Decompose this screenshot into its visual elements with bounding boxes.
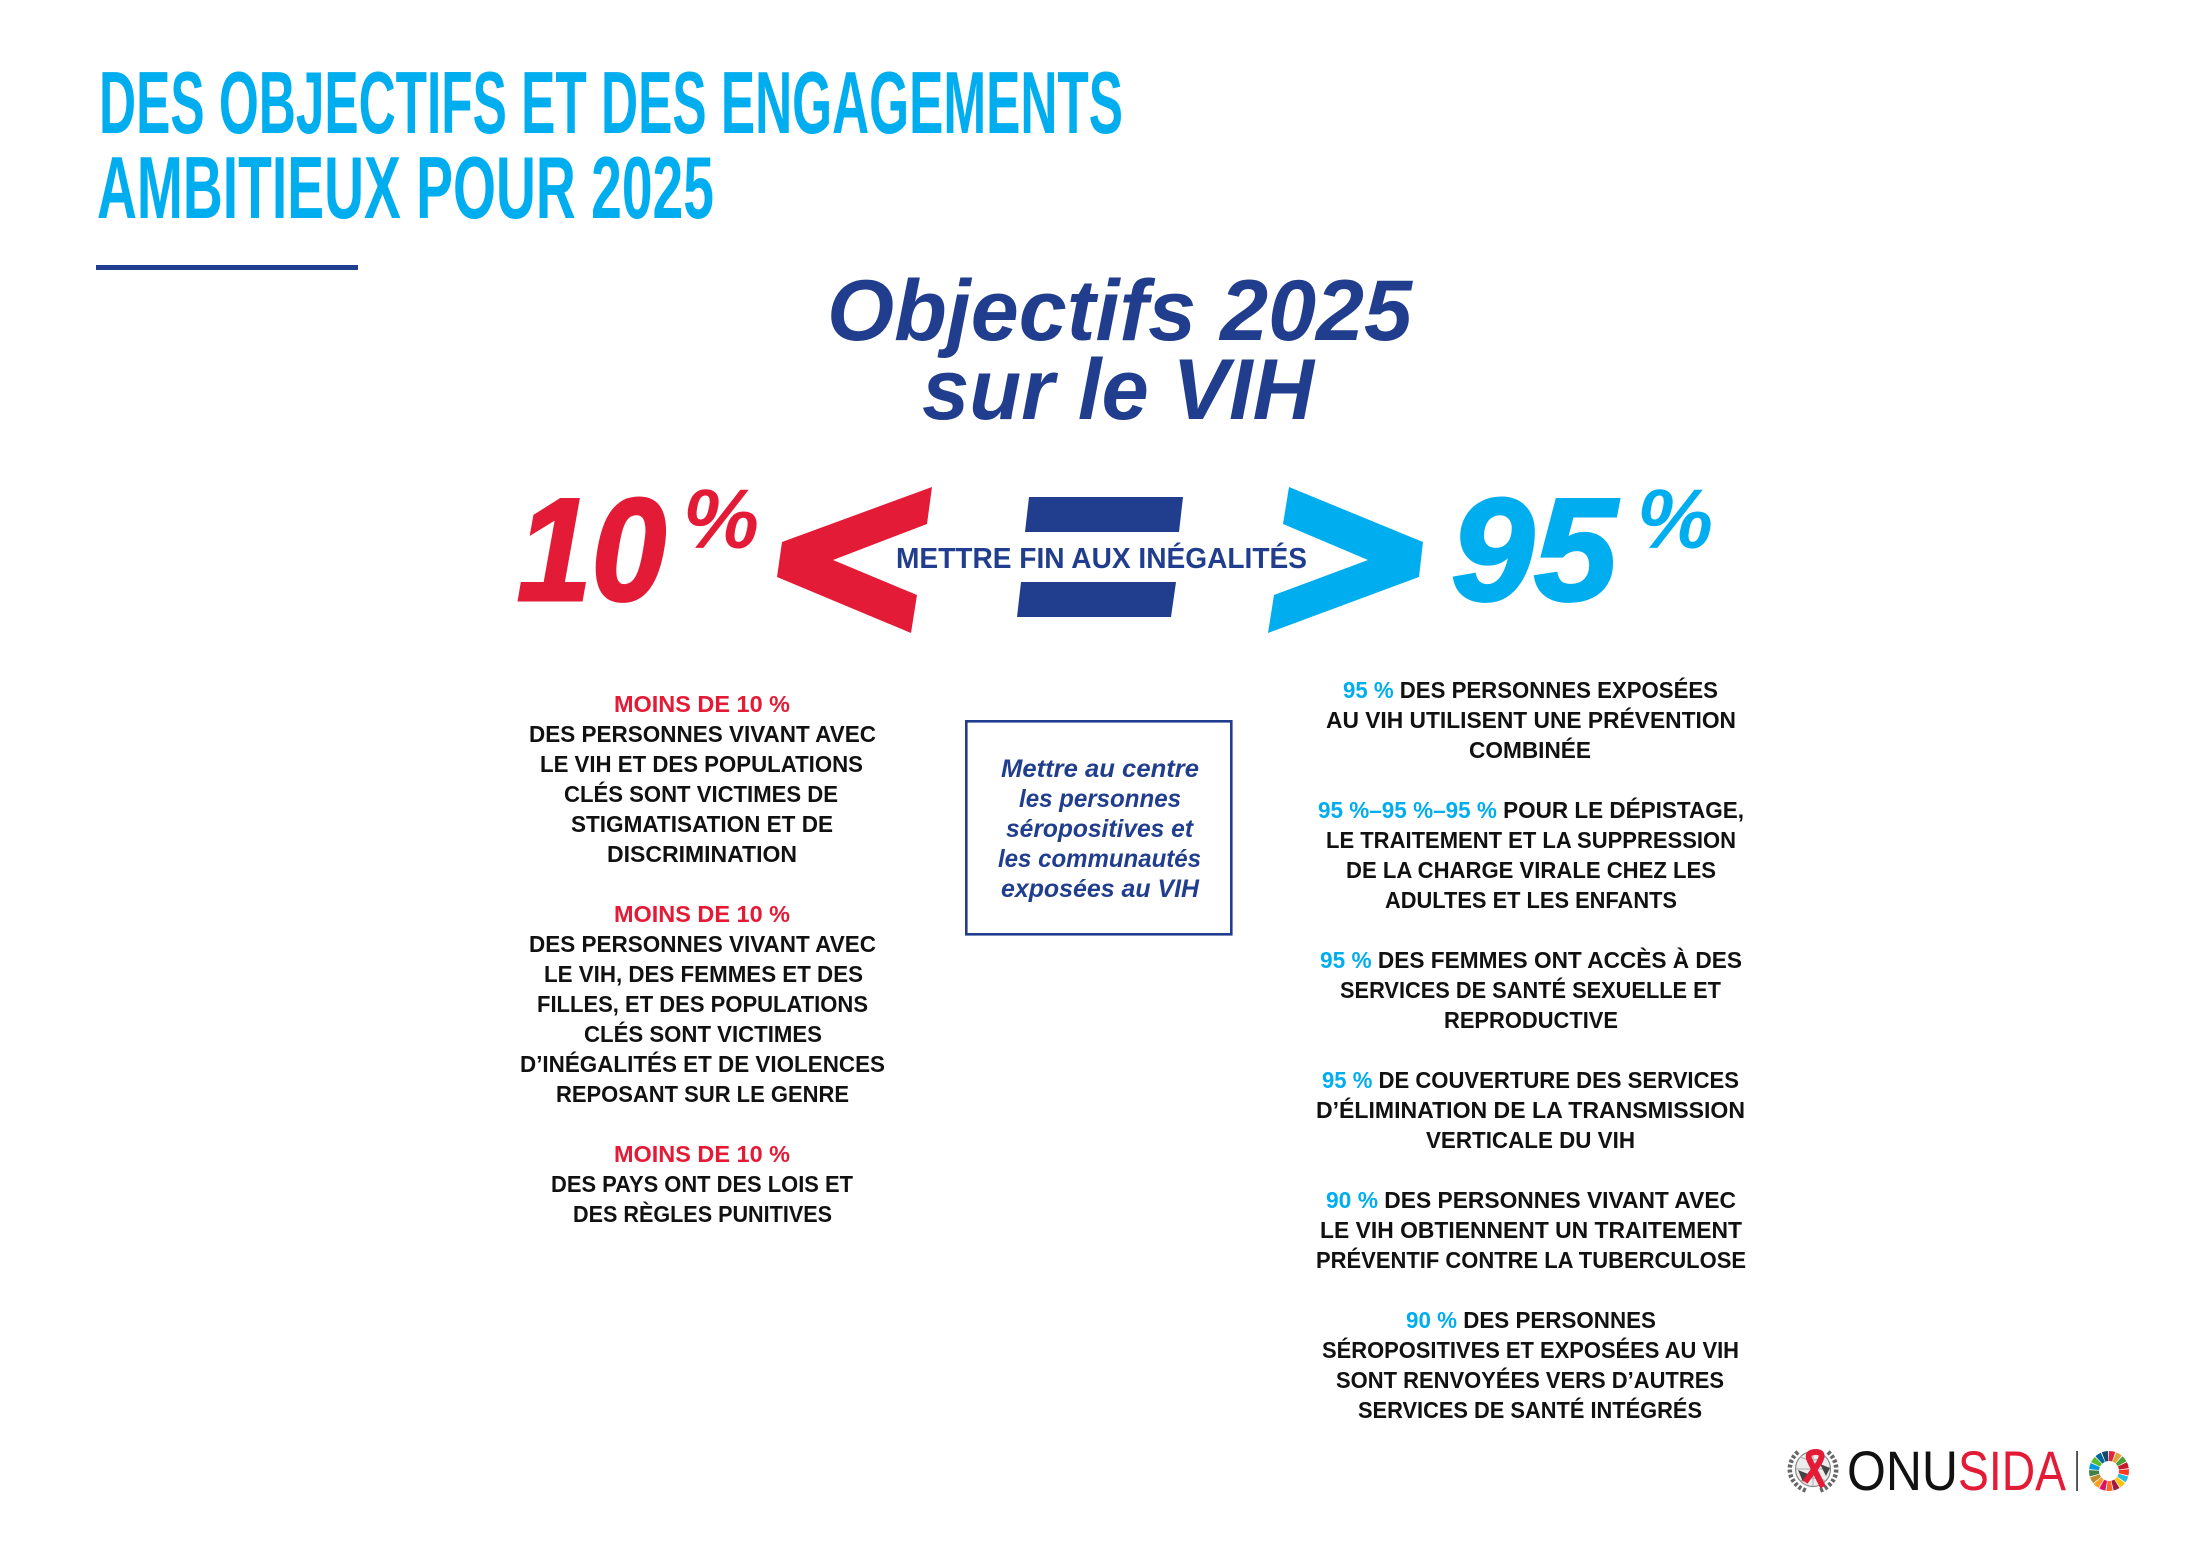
slogan: mettre fin aux inégalités: METTRE FIN AUX INÉGALITÉS (896, 541, 1307, 575)
icon: SDG wheel (2088, 1450, 2130, 1492)
target: inégalités et violences: D’INÉGALITÉS ET DE VIOLENCES (520, 1051, 885, 1077)
target: inégalités et violences (520, 901, 885, 1107)
big number: 95 % (1451, 468, 1713, 631)
target: prévention combinée: 95 % DES PERSONNES EXPOSÉES (1343, 677, 1718, 703)
target: services de santé intégrés: SÉROPOSITIVES ET EXPOSÉES AU VIH (1322, 1337, 1739, 1363)
icon: UN emblem with red ribbon (1790, 1452, 1836, 1491)
big number: 10 % (517, 468, 759, 631)
target: services de santé intégrés: SONT RENVOYÉES VERS D’AUTRES (1336, 1367, 1724, 1393)
callout: mettre au centre: les personnes (1019, 785, 1181, 813)
big number: 10 %: 10 (517, 468, 666, 631)
big number: 95 %: % (1637, 472, 1713, 566)
callout: mettre au centre: Mettre au centre (1001, 755, 1199, 783)
target: tuberculose: 90 % DES PERSONNES VIVANT AVEC (1326, 1187, 1736, 1213)
title: DES OBJECTIFS ET DES ENGAGEMENTS (99, 53, 1123, 152)
title rule (96, 265, 358, 270)
callout: mettre au centre (966, 721, 1231, 934)
heading: Objectifs 2025 sur le VIH (827, 263, 1413, 438)
wordmark: ONU (1847, 1439, 1958, 1502)
target: services de santé intégrés: 90 % DES PERSONNES (1406, 1307, 1656, 1333)
target: services de santé intégrés (1322, 1307, 1739, 1423)
title: AMBITIEUX POUR 2025 (97, 138, 714, 237)
heading: Objectifs 2025 sur le VIH: sur le VIH (922, 342, 1316, 438)
target: inégalités et violences: CLÉS SONT VICTIMES (584, 1021, 822, 1047)
target: stigmatisation (529, 691, 876, 867)
target: santé sexuelle et reproductive: REPRODUCTIVE (1444, 1007, 1618, 1033)
panel: 95 % targets (1316, 677, 1746, 1423)
target: santé sexuelle et reproductive: 95 % DES FEMMES ONT ACCÈS À DES (1320, 947, 1742, 973)
target: stigmatisation: MOINS DE 10 % (614, 691, 790, 717)
title (97, 53, 1123, 237)
target: dépistage et traitement: DE LA CHARGE VIRALE CHEZ LES (1346, 857, 1716, 883)
target: inégalités et violences: LE VIH, DES FEMMES ET DES (544, 961, 863, 987)
big number: 10 %: % (683, 472, 759, 566)
target: lois punitives: DES PAYS ONT DES LOIS ET (551, 1171, 853, 1197)
target: inégalités et violences: DES PERSONNES VIVANT AVEC (529, 931, 876, 957)
target: inégalités et violences: MOINS DE 10 % (614, 901, 790, 927)
target: prévention combinée: AU VIH UTILISENT UNE PRÉVENTION (1326, 707, 1736, 733)
target: lois punitives (551, 1141, 853, 1227)
big number: 95 %: 95 (1451, 468, 1619, 631)
target: lois punitives: DES RÈGLES PUNITIVES (573, 1201, 832, 1227)
target: dépistage et traitement: ADULTES ET LES ENFANTS (1385, 887, 1677, 913)
target: transmission verticale (1316, 1067, 1745, 1153)
target: transmission verticale: 95 % DE COUVERTURE DES SERVICES (1322, 1067, 1739, 1093)
target: lois punitives: MOINS DE 10 % (614, 1141, 790, 1167)
target: stigmatisation: CLÉS SONT VICTIMES DE (564, 781, 838, 807)
target: inégalités et violences: FILLES, ET DES POPULATIONS (537, 991, 868, 1017)
target: transmission verticale: VERTICALE DU VIH (1426, 1127, 1635, 1153)
target: stigmatisation: DISCRIMINATION (607, 841, 797, 867)
equals sign (1017, 497, 1183, 617)
target: stigmatisation: LE VIH ET DES POPULATIONS (540, 751, 863, 777)
target: prévention combinée: COMBINÉE (1469, 737, 1591, 763)
callout: mettre au centre: séropositives et (1006, 815, 1195, 843)
target: stigmatisation: DES PERSONNES VIVANT AVEC (529, 721, 876, 747)
target: dépistage et traitement: LE TRAITEMENT ET LA SUPPRESSION (1326, 827, 1736, 853)
wordmark: SIDA (1958, 1439, 2067, 1502)
target: services de santé intégrés: SERVICES DE SANTÉ INTÉGRÉS (1358, 1397, 1702, 1423)
logo: ONUSIDA (1790, 1439, 2130, 1502)
target: stigmatisation: STIGMATISATION ET DE (571, 811, 833, 837)
greater-than chevron (1268, 487, 1423, 633)
target: tuberculose (1316, 1187, 1746, 1273)
heading: Objectifs 2025 sur le VIH: Objectifs 2025 (827, 263, 1413, 359)
target: transmission verticale: D’ÉLIMINATION DE LA TRANSMISSION (1316, 1097, 1745, 1123)
target: santé sexuelle et reproductive: SERVICES DE SANTÉ SEXUELLE ET (1340, 977, 1721, 1003)
target: tuberculose: PRÉVENTIF CONTRE LA TUBERCULOSE (1316, 1247, 1746, 1273)
callout: mettre au centre: les communautés (998, 845, 1201, 873)
target: dépistage et traitement: 95 %–95 %–95 % POUR LE DÉPISTAGE, (1318, 797, 1744, 823)
target: inégalités et violences: REPOSANT SUR LE GENRE (556, 1081, 849, 1107)
wordmark (1847, 1439, 2067, 1502)
target: tuberculose: LE VIH OBTIENNENT UN TRAITEMENT (1320, 1217, 1742, 1243)
target: prévention combinée (1326, 677, 1736, 763)
target: santé sexuelle et reproductive (1320, 947, 1742, 1033)
callout: mettre au centre: exposées au VIH (1001, 875, 1200, 903)
panel: moins de 10 % targets (520, 691, 885, 1227)
less-than chevron (777, 487, 932, 633)
target: dépistage et traitement (1318, 797, 1744, 913)
